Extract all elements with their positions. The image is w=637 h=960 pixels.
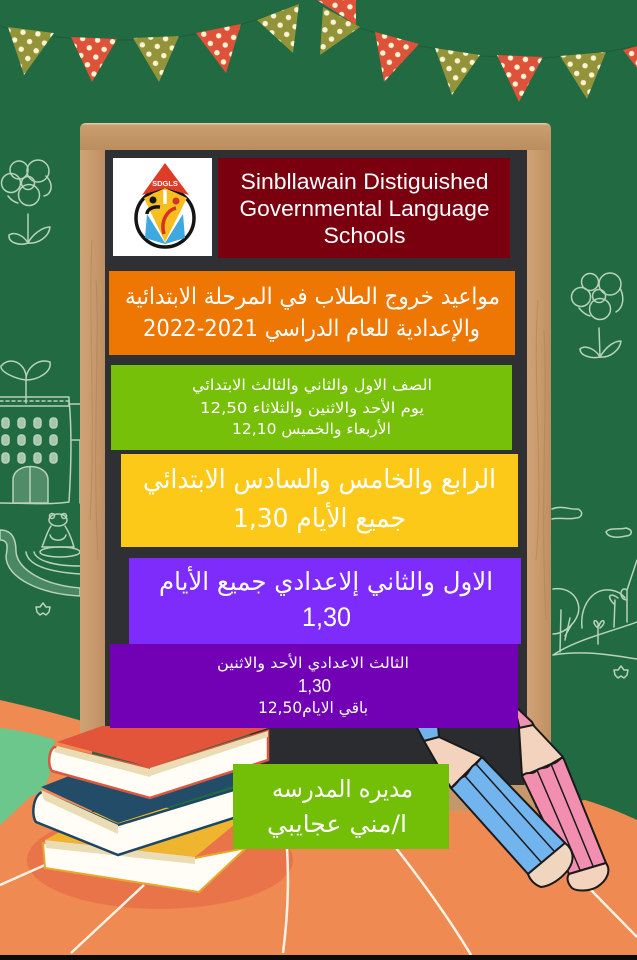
school name panel [218, 158, 510, 258]
grades 4-6 panel: الرابع والخامس والسادس الابتدائي [143, 465, 496, 495]
logo panel [113, 158, 212, 256]
chalk drawing: sprout and building [0, 361, 80, 504]
principal signature panel: ا/مني عجايبي [267, 810, 407, 838]
logo: red roof [142, 163, 189, 195]
preparatory 1-2 panel [129, 558, 521, 644]
logo: yellow kite [144, 188, 187, 242]
grades 4-6 panel [121, 454, 518, 547]
school name panel: Sinbllawain Distiguished [240, 169, 488, 194]
preparatory 3 panel: 1,30 [298, 676, 331, 696]
preparatory 1-2 panel: 1,30 [302, 602, 351, 632]
title panel [109, 271, 515, 355]
icon: chalk star left [36, 603, 50, 615]
principal signature panel [233, 764, 449, 849]
school name panel: Governmental Language [240, 196, 490, 221]
bunting flags [0, 0, 637, 102]
grades 1-3 panel [111, 365, 512, 450]
grades 4-6 panel: جميع الأيام 1,30 [233, 501, 406, 534]
title panel: والإعدادية للعام الدراسي 2021-2022 [143, 316, 480, 342]
books stack [33, 726, 268, 892]
pink pencil [514, 705, 608, 890]
icon: chalk star right [614, 666, 628, 678]
preparatory 3 panel: باقي الايام12,50 [258, 698, 368, 718]
logo: open book [145, 214, 185, 244]
book: dark blue [33, 760, 240, 855]
logo: figures [147, 190, 180, 234]
book: red [49, 726, 268, 798]
preparatory 3 panel: الثالث الاعدادي الأحد والاثنين [217, 653, 409, 673]
chalk drawing: left flower [2, 160, 51, 244]
grades 1-3 panel: الصف الاول والثاني والثالث الابتدائي [192, 376, 432, 395]
chalk drawing: right clouds, trees and house [552, 507, 637, 659]
preparatory 1-2 panel: الاول والثاني إلاعدادي جميع الأيام [159, 565, 493, 597]
blue pencil [416, 726, 573, 887]
wooden chalkboard frame [80, 123, 551, 811]
book: yellow [43, 800, 246, 892]
principal signature panel: مديره المدرسه [272, 775, 413, 803]
logo: letters: SDGLS [152, 179, 178, 188]
grades 1-3 panel: الأربعاء والخميس 12,10 [232, 419, 391, 438]
chalk drawing: right flower [572, 273, 623, 358]
bottom black band [0, 955, 637, 960]
logo: black ring [136, 189, 194, 247]
school name panel: Schools [324, 223, 406, 248]
grades 1-3 panel: يوم الأحد والاثنين والثلاثاء 12,50 [200, 398, 424, 417]
preparatory 3 panel [110, 644, 518, 728]
title panel: مواعيد خروج الطلاب في المرحلة الابتدائية [125, 284, 500, 310]
chalk drawing: frog, pond and stream [0, 514, 80, 596]
running track ground [0, 700, 637, 955]
